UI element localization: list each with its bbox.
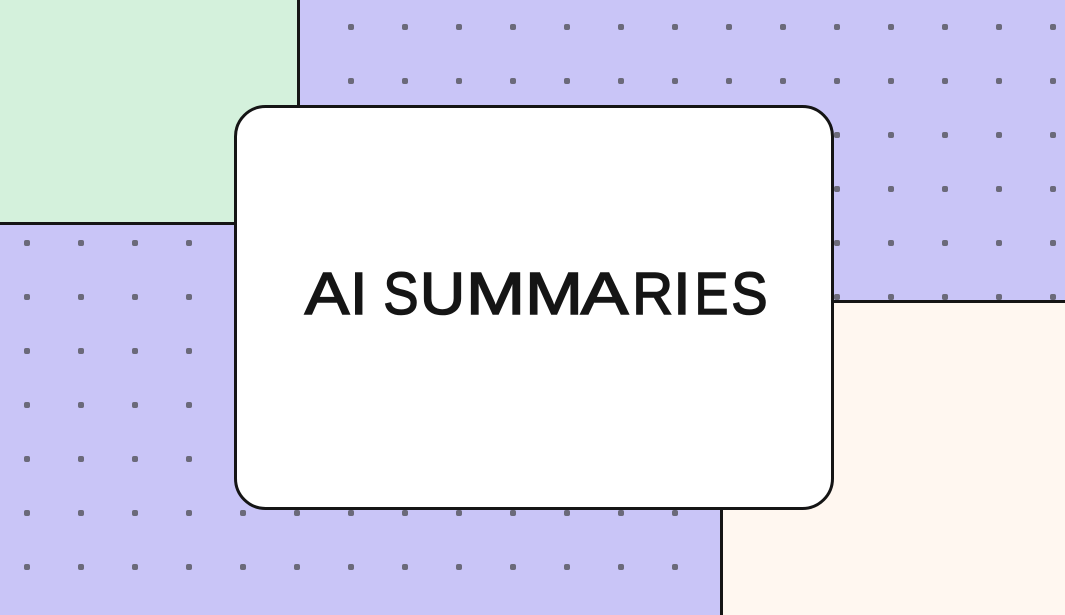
title: U	[420, 260, 465, 327]
title: A	[581, 260, 629, 327]
title: S	[383, 260, 418, 327]
title: M	[525, 260, 583, 327]
panel: lilac dotted top-right block	[298, 0, 1065, 302]
title: R	[632, 260, 673, 327]
title card	[236, 106, 832, 508]
title: S	[731, 260, 768, 327]
title: M	[466, 260, 525, 327]
panel: green top-left block	[0, 0, 298, 224]
panel: lilac dotted bottom-left block	[0, 224, 722, 615]
title: I	[673, 260, 690, 327]
title: E	[695, 260, 728, 327]
title: I	[350, 260, 367, 327]
panel: cream bottom-right block	[720, 300, 1065, 615]
title: A	[305, 260, 350, 327]
